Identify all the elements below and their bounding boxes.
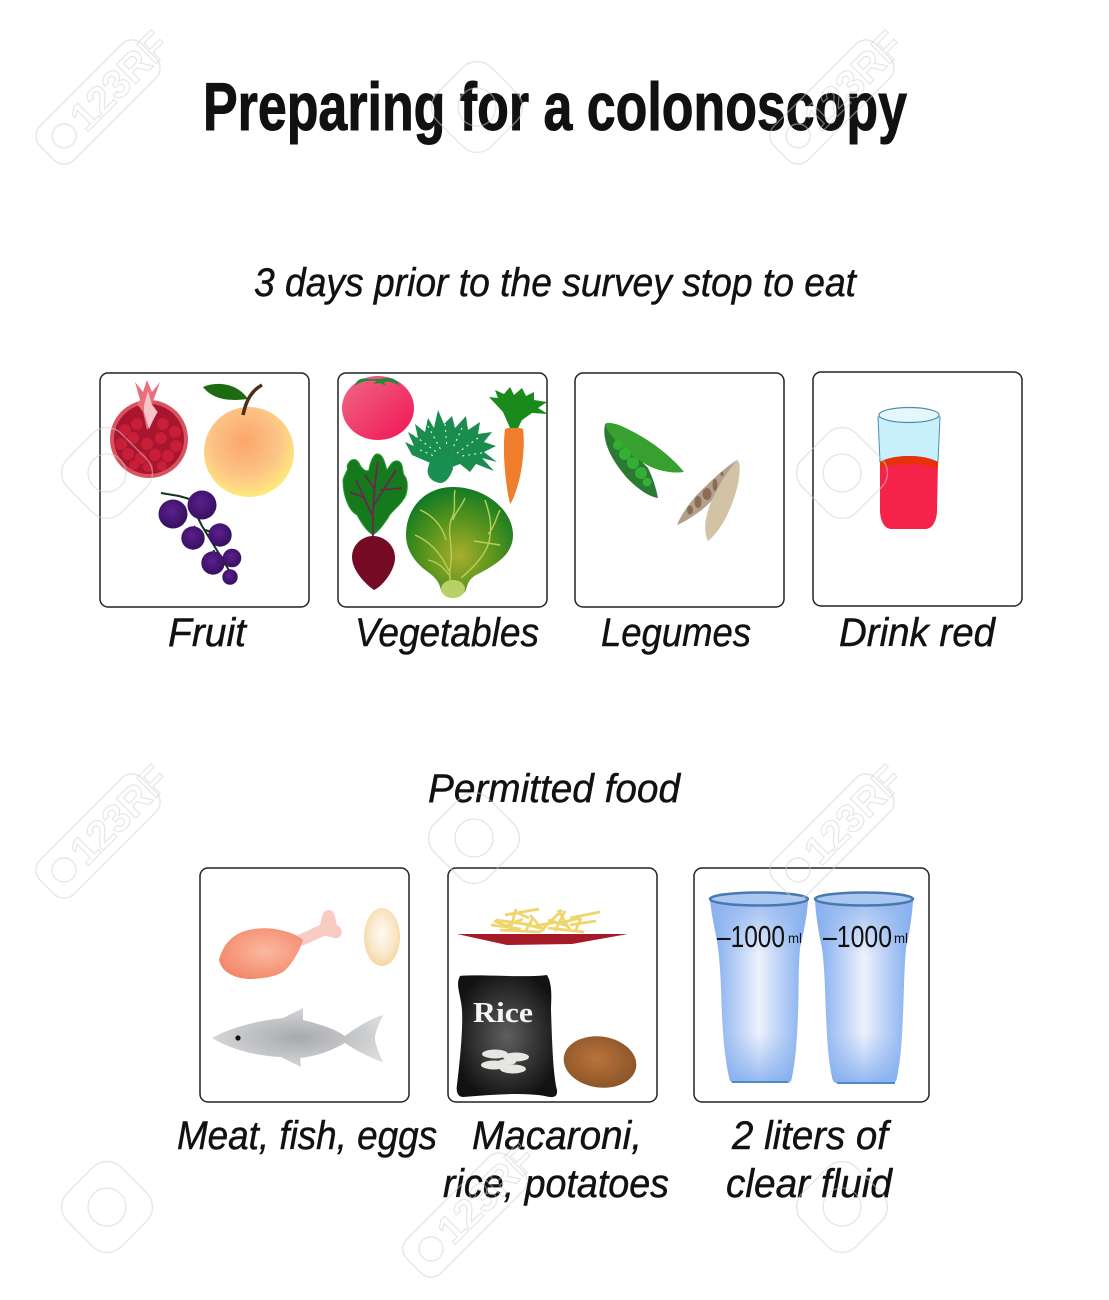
icon: dill	[405, 410, 497, 483]
watermarks: 123RF stamps	[30, 21, 913, 1283]
icon: beet	[343, 454, 407, 590]
icon: right glass: –1000	[823, 919, 892, 954]
label: drink red: Drink red	[839, 611, 997, 655]
watermarks: 123RF stamps: 123RF	[62, 23, 178, 139]
heading: foods to stop: 3 days prior to the survey stop to eat	[254, 261, 858, 305]
icon: brown beans	[677, 460, 740, 541]
label: legumes: Legumes	[601, 611, 751, 655]
label: vegetables: Vegetables	[355, 611, 539, 655]
icon: currants	[158, 490, 241, 585]
icon: chicken leg	[219, 910, 342, 979]
icon: potato	[560, 1032, 640, 1092]
watermarks: 123RF stamps: 123RF	[796, 23, 912, 139]
panel: legumes	[575, 373, 784, 607]
label: meat, fish, eggs: Meat, fish, eggs	[177, 1114, 437, 1158]
icon: left glass	[710, 892, 808, 1083]
icon: tomato	[342, 376, 414, 440]
icon: orange	[203, 384, 294, 497]
icon: pomegranate	[110, 380, 188, 478]
label: 2 liters of clear fluid: clear fluid	[726, 1162, 894, 1206]
icon: glass of red drink	[878, 408, 940, 529]
panel: meat, fish, eggs	[200, 868, 409, 1102]
icon: egg	[364, 908, 400, 966]
icon: bag of rice: Rice	[473, 997, 533, 1029]
label: 2 liters of clear fluid: 2 liters of	[731, 1114, 892, 1158]
panel: drink red	[813, 372, 1022, 606]
watermarks: 123RF stamps: 123RF	[796, 757, 912, 873]
icon: lettuce	[406, 487, 513, 598]
label: fruit: Fruit	[168, 611, 248, 655]
icon: fish	[212, 1008, 383, 1067]
icon: left glass: –1000	[717, 919, 785, 954]
label: macaroni, rice, potatoes: rice, potatoes	[443, 1162, 669, 1206]
icon: right glass: ml	[894, 930, 908, 946]
icon: plate of macaroni	[457, 909, 628, 945]
panel: macaroni, rice, potatoes	[448, 868, 657, 1102]
watermarks: 123RF stamps: 123RF	[429, 1136, 545, 1252]
watermarks: 123RF stamps: 123RF	[62, 757, 178, 873]
panel: vegetables	[338, 373, 548, 607]
panel: fruit	[100, 373, 309, 607]
heading: permitted food: Permitted food	[428, 767, 682, 811]
icon: carrot	[489, 387, 548, 504]
label: macaroni, rice, potatoes: Macaroni,	[472, 1114, 642, 1158]
icon: bag of rice	[457, 975, 557, 1097]
icon: right glass	[815, 892, 913, 1083]
panel: 2 liters of fluid	[694, 868, 929, 1102]
icon: left glass: ml	[788, 930, 802, 946]
label: macaroni, rice, potatoes	[443, 1114, 669, 1206]
title: Preparing for a colonoscopy	[203, 69, 907, 145]
label: 2 liters of clear fluid	[726, 1114, 894, 1206]
icon: green pods	[604, 423, 684, 498]
